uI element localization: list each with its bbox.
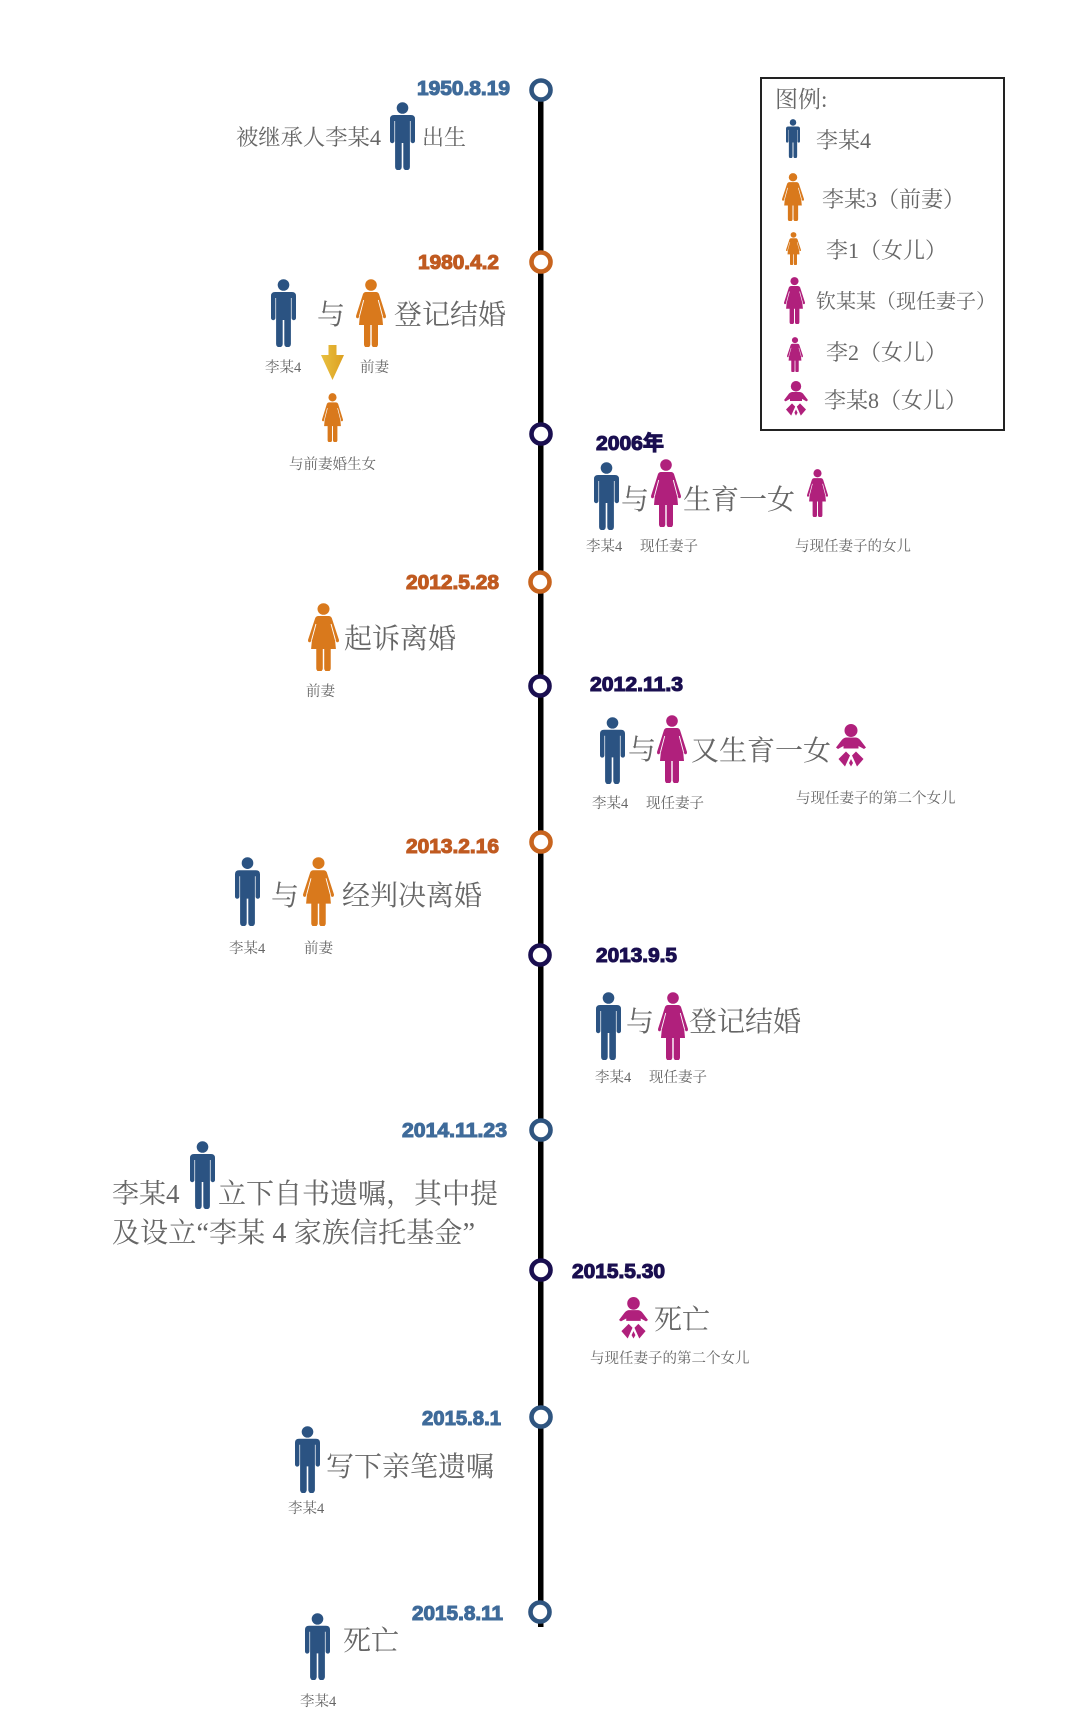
panel: legend: 图例: bbox=[775, 87, 827, 112]
event: 2015.8.1 handwritten will: 2015.8.1 bbox=[422, 1407, 501, 1430]
event: 2013.9.5 remarriage: 李某4 bbox=[595, 1068, 632, 1086]
panel: legend: 李某8（女儿） bbox=[824, 388, 967, 413]
arrow: parents to daughter bbox=[321, 345, 344, 380]
event: 1980.4.2 marriage registration: 登记结婚 bbox=[394, 299, 506, 331]
event: 1980.4.2 marriage registration: 与前妻婚生女 bbox=[289, 455, 376, 473]
event: 2015.5.30 daughter's death: 2015.5.30 bbox=[572, 1260, 665, 1283]
event: 1980.4.2 marriage registration bbox=[265, 251, 506, 473]
event: 2006 first daughter: 与现任妻子的女儿 bbox=[795, 537, 911, 555]
event: 2013.9.5 remarriage: 登记结婚 bbox=[689, 1006, 801, 1038]
panel: legend: 李1（女儿） bbox=[826, 238, 947, 263]
event: 2015.5.30 daughter's death: 与现任妻子的第二个女儿 bbox=[590, 1349, 750, 1367]
event: 2006 first daughter: 2006年 bbox=[596, 432, 664, 455]
event: 1950.8.19 birth: 出生 bbox=[422, 125, 466, 150]
event: 1950.8.19 birth bbox=[236, 77, 510, 170]
panel: legend bbox=[761, 78, 1004, 430]
event: 2012.5.28 divorce suit: 2012.5.28 bbox=[406, 571, 499, 594]
event: 1980.4.2 marriage registration: 李某4 bbox=[265, 358, 302, 376]
event: 2015.5.30 daughter's death: 死亡 bbox=[654, 1304, 710, 1336]
event: 2006 first daughter: 生育一女 bbox=[683, 484, 795, 516]
event: 2013.2.16 divorce judgment: 李某4 bbox=[229, 939, 266, 957]
event: 1980.4.2 marriage registration: 与 bbox=[317, 299, 345, 331]
event: 2014.11.23 self-written will: 李某4 bbox=[112, 1179, 180, 1209]
event: 2006 first daughter: 李某4 bbox=[586, 537, 623, 555]
event: 2012.11.3 second daughter: 又生育一女 bbox=[691, 735, 831, 767]
event: 2015.8.11 death: 死亡 bbox=[343, 1625, 399, 1657]
event: 2006 first daughter bbox=[586, 432, 911, 555]
event: 2006 first daughter: 与 bbox=[621, 484, 649, 516]
panel: legend: 钦某某（现任妻子） bbox=[816, 290, 996, 313]
event: 2014.11.23 self-written will: 2014.11.23 bbox=[402, 1119, 507, 1142]
event: 2014.11.23 self-written will: 及设立“李某 4 家族信托基金” bbox=[112, 1217, 475, 1249]
event: 2012.5.28 divorce suit bbox=[306, 571, 499, 700]
event: 2006 first daughter: 现任妻子 bbox=[640, 537, 698, 555]
event: 1950.8.19 birth: 1950.8.19 bbox=[417, 77, 510, 100]
event: 2012.11.3 second daughter: 与 bbox=[628, 734, 656, 766]
event: 2014.11.23 self-written will: 立下自书遗嘱，其中提 bbox=[218, 1178, 498, 1210]
event: 2015.8.11 death: 李某4 bbox=[300, 1692, 337, 1710]
timeline nodes bbox=[530, 80, 550, 1622]
event: 1980.4.2 marriage registration: 1980.4.2 bbox=[418, 251, 499, 274]
event: 2013.2.16 divorce judgment: 经判决离婚 bbox=[342, 880, 482, 912]
event: 2015.8.1 handwritten will: 李某4 bbox=[288, 1499, 325, 1517]
event: 2012.5.28 divorce suit: 前妻 bbox=[306, 682, 335, 700]
event: 2015.8.11 death bbox=[300, 1602, 503, 1710]
event: 2015.8.11 death: 2015.8.11 bbox=[412, 1602, 503, 1625]
event: 2012.5.28 divorce suit: 起诉离婚 bbox=[344, 623, 456, 655]
event: 1950.8.19 birth: 被继承人李某4 bbox=[236, 125, 381, 150]
event: 2015.8.1 handwritten will bbox=[288, 1407, 501, 1517]
panel: legend: 李2（女儿） bbox=[826, 340, 947, 365]
event: 1980.4.2 marriage registration: 前妻 bbox=[360, 358, 389, 376]
event: 2013.2.16 divorce judgment: 前妻 bbox=[304, 939, 333, 957]
panel: legend: 李某3（前妻） bbox=[822, 187, 965, 212]
event: 2012.11.3 second daughter: 现任妻子 bbox=[646, 794, 704, 812]
event: 2013.9.5 remarriage bbox=[595, 944, 801, 1086]
event: 2013.2.16 divorce judgment: 与 bbox=[271, 880, 299, 912]
event: 2013.2.16 divorce judgment bbox=[229, 835, 499, 957]
event: 2013.9.5 remarriage: 与 bbox=[626, 1006, 654, 1038]
event: 2015.8.1 handwritten will: 写下亲笔遗嘱 bbox=[326, 1451, 494, 1483]
event: 2013.9.5 remarriage: 现任妻子 bbox=[649, 1068, 707, 1086]
event: 2012.11.3 second daughter bbox=[590, 673, 956, 812]
panel: legend: 李某4 bbox=[816, 128, 871, 153]
event: 2012.11.3 second daughter: 与现任妻子的第二个女儿 bbox=[796, 789, 956, 807]
event: 2012.11.3 second daughter: 李某4 bbox=[592, 794, 629, 812]
event: 2013.9.5 remarriage: 2013.9.5 bbox=[596, 944, 677, 967]
event: 2013.2.16 divorce judgment: 2013.2.16 bbox=[406, 835, 499, 858]
event: 2014.11.23 self-written will bbox=[112, 1119, 507, 1249]
event: 2015.5.30 daughter's death bbox=[572, 1260, 750, 1367]
event: 2012.11.3 second daughter: 2012.11.3 bbox=[590, 673, 683, 696]
timeline axis bbox=[538, 90, 544, 1627]
